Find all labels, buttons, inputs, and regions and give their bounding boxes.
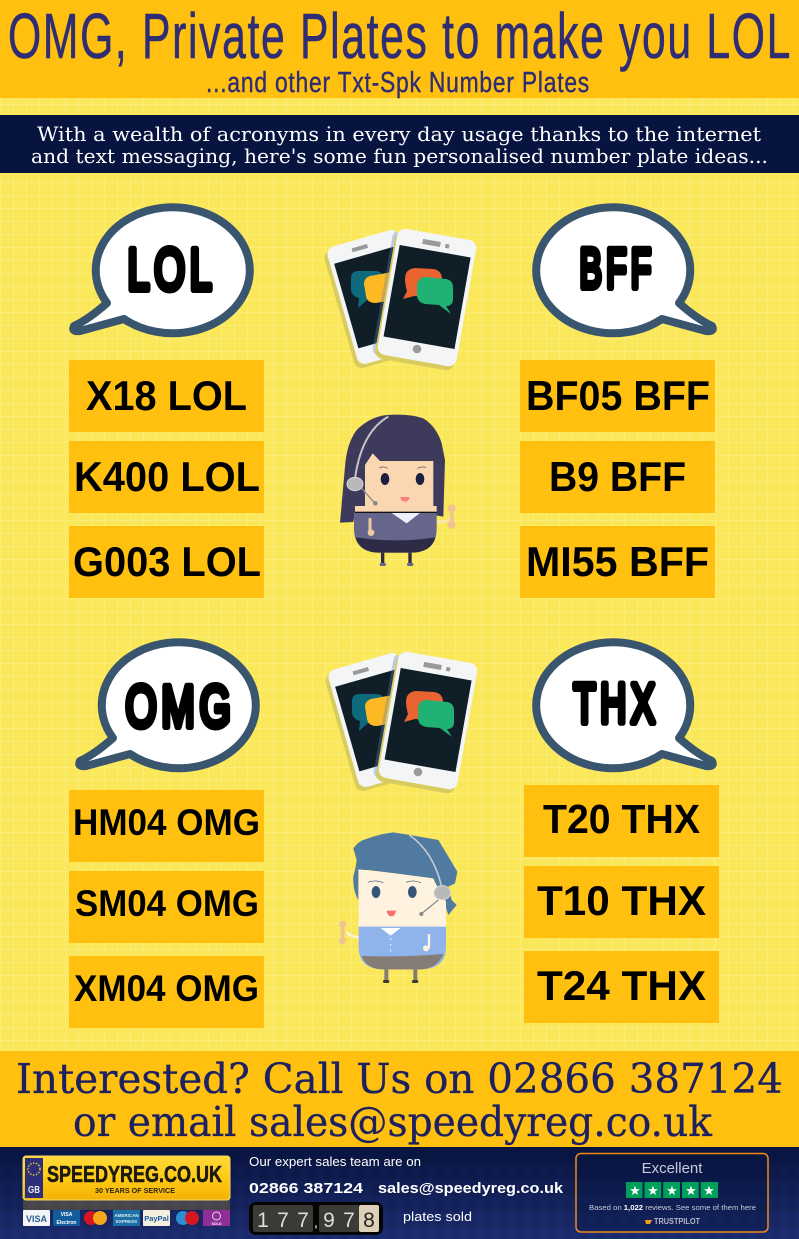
plates sold counter: 8 [363,1209,375,1232]
plates: BFF [520,360,715,598]
speech bubble: LOL: LOL [128,238,216,302]
plates: LOL: K400 LOL [74,453,260,500]
plates: BFF: MI55 BFF [526,538,709,585]
sales contact text: Our expert sales team are on [249,1155,421,1169]
speech bubble: OMG [79,642,256,768]
Trustpilot rating box: ★ [647,1184,659,1199]
plates sold counter: 1 [257,1209,269,1232]
Trustpilot rating box: Based on 1,022 reviews. See some of them here [589,1203,756,1212]
plates: THX: T24 THX [537,962,706,1009]
payment card icons: AMERICAN [114,1213,139,1218]
character: woman with headset [340,415,456,566]
Trustpilot rating box: ★ [629,1184,641,1199]
speech bubble: BFF [536,207,713,333]
plates sold label: plates sold [403,1209,472,1224]
Trustpilot rating box: Excellent [642,1160,703,1177]
plates: LOL: G003 LOL [73,538,261,585]
footer bar [0,1147,799,1239]
plates sold counter: 9 [323,1209,335,1232]
plates sold counter: 7 [277,1209,289,1232]
sales contact text: sales@speedyreg.co.uk [378,1180,564,1197]
plates: THX: T10 THX [537,877,706,924]
Trustpilot rating box [576,1154,768,1232]
payment card icons: EXPRESS [116,1219,137,1224]
sales contact text [249,1155,564,1197]
speech bubble: THX [536,642,713,768]
plates sold counter [249,1202,383,1235]
call to action banner: Interested? Call Us on 02866 387124 [16,1055,783,1103]
payment card icons: SOLO [212,1222,222,1226]
plates: OMG: XM04 OMG [74,968,259,1009]
plates sold counter: , [314,1214,318,1230]
call to action banner [0,1051,799,1147]
plates: OMG: HM04 OMG [73,802,260,843]
logo: SpeedyReg number plate [23,1156,230,1210]
sales contact text: 02866 387124 [249,1180,364,1197]
subtitle: ...and other Txt-Spk Number Plates [206,67,590,99]
Trustpilot rating box: ★ [703,1184,715,1199]
Trustpilot rating box: TRUSTPILOT [654,1217,700,1226]
speech bubble: OMG: OMG [126,674,236,740]
plates: BFF: B9 BFF [549,453,686,500]
header banner [0,0,799,99]
speech bubble: BFF: BFF [580,236,656,300]
plates: OMG: SM04 OMG [75,883,259,924]
Trustpilot rating box: ★ [685,1184,697,1199]
plates: THX: T20 THX [543,796,700,842]
plates: LOL [69,360,264,598]
payment card icons: PayPal [144,1214,169,1223]
plates: BFF: BF05 BFF [526,372,710,419]
intro band: and text messaging, here's some fun personalised number plate ideas... [31,144,768,168]
plates sold counter: 7 [343,1209,355,1232]
payment card icons: VISA [61,1212,73,1218]
plates: OMG [69,790,264,1028]
plates: LOL: X18 LOL [86,372,247,419]
character: man with headset [339,832,457,983]
payment card icons: Electron [56,1220,77,1226]
speech bubble: LOL [73,207,250,333]
intro band [0,115,799,173]
logo: SpeedyReg number plate: GB [28,1185,40,1196]
logo: SpeedyReg number plate: SPEEDYREG.CO.UK [47,1161,222,1187]
plates sold counter: 7 [297,1209,309,1232]
intro band: With a wealth of acronyms in every day usage thanks to the internet [37,122,761,146]
icon: phones with chat bubbles, bottom [324,651,479,794]
payment card icons [23,1210,230,1226]
speech bubble: THX: THX [574,672,660,734]
icon: phones with chat bubbles, top [323,228,478,371]
plates: THX [524,785,719,1023]
payment card icons: VISA [26,1214,47,1224]
logo: SpeedyReg number plate: 30 YEARS OF SERVICE [95,1186,175,1195]
call to action banner: or email sales@speedyreg.co.uk [73,1098,713,1146]
Trustpilot rating box: ★ [666,1184,678,1199]
